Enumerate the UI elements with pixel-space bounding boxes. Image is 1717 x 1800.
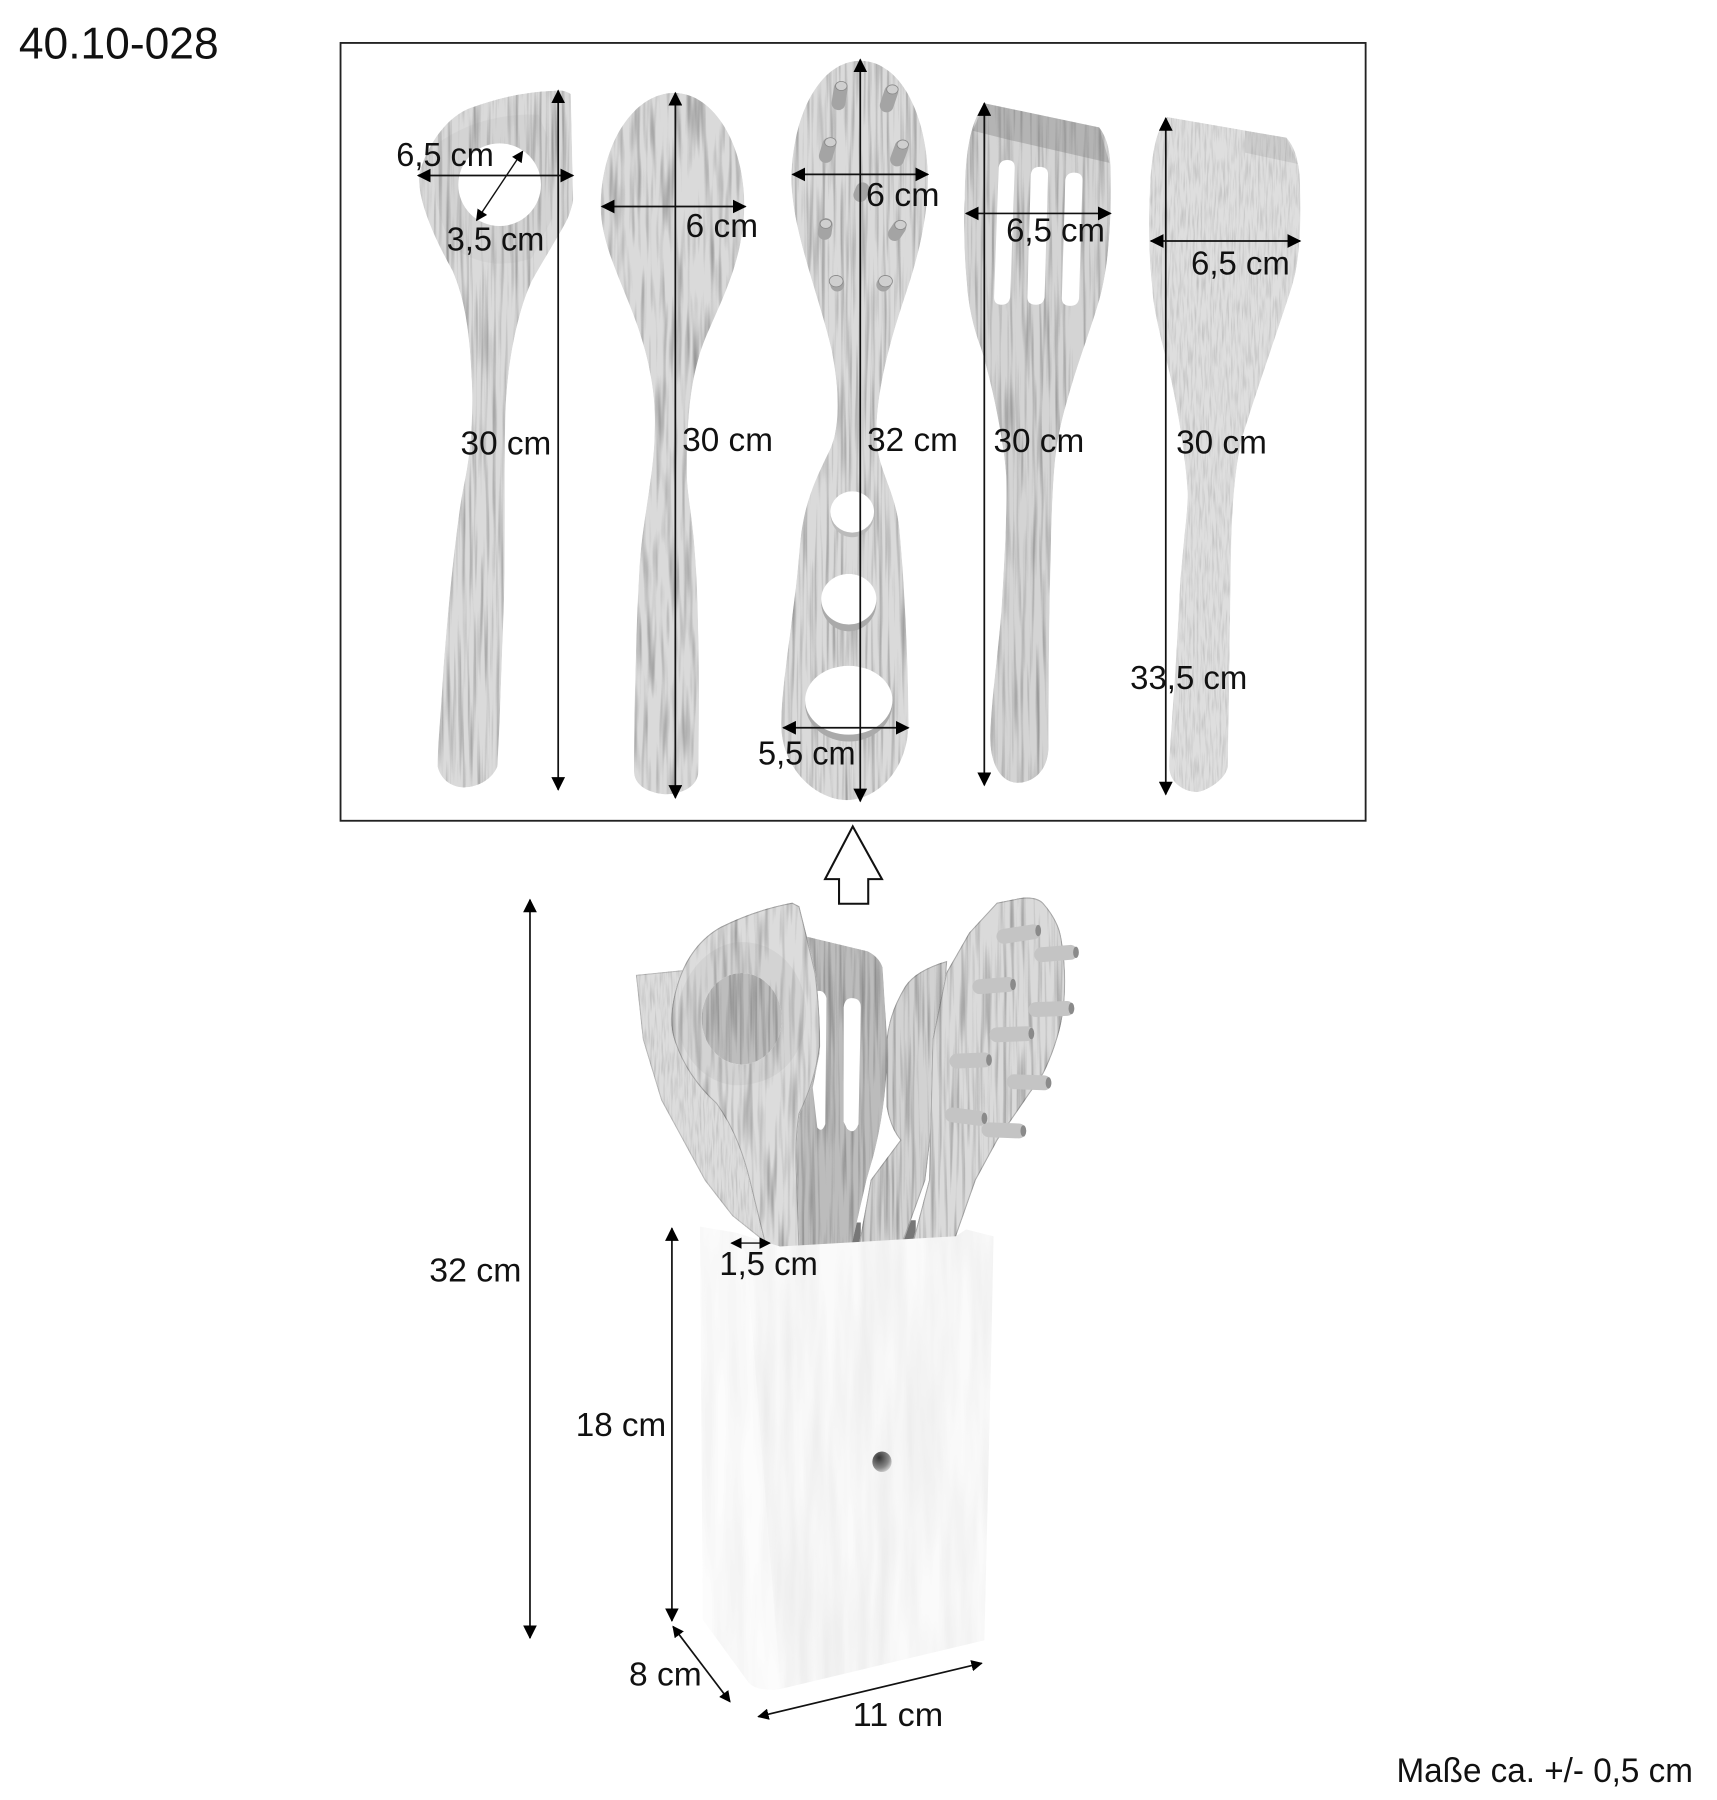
dimension labels: holder: 32 cm bbox=[429, 1253, 521, 1290]
arrow: outline up arrow between holder and panel bbox=[825, 826, 882, 904]
utensil: spaghetti spoon with pegs and holes bbox=[781, 61, 928, 800]
spatula slots bbox=[995, 161, 1082, 305]
dimension labels: top panel: 6,5 cm bbox=[1006, 213, 1105, 250]
dimension labels: holder: 18 cm bbox=[576, 1407, 666, 1444]
dimensions: holder arrows bbox=[530, 900, 982, 1717]
pegs bbox=[820, 81, 909, 287]
dimension labels: top panel: 3,5 cm bbox=[447, 222, 544, 259]
utensils in holder bbox=[636, 898, 1079, 1250]
slots in holder spatula bbox=[813, 991, 861, 1131]
dimension labels: top panel: 5,5 cm bbox=[758, 736, 856, 773]
dimension labels: holder: 8 cm bbox=[629, 1657, 702, 1694]
dimension labels: top panel: 6 cm bbox=[686, 208, 758, 245]
dimension labels: top panel: 32 cm bbox=[867, 422, 958, 459]
dimension labels: holder bbox=[429, 1246, 943, 1734]
flat spatula bevel bbox=[1245, 131, 1298, 164]
dimension labels: top panel: 30 cm bbox=[993, 423, 1084, 460]
dimension labels: holder: 1,5 cm bbox=[719, 1246, 818, 1283]
dimension labels: top panel: 30 cm bbox=[682, 422, 773, 459]
dimension labels: top panel: 30 cm bbox=[461, 425, 551, 462]
dimension labels: top panel: 30 cm bbox=[1176, 424, 1267, 461]
back flat spatula bbox=[636, 971, 790, 1250]
dimension labels: holder: 11 cm bbox=[853, 1697, 943, 1734]
utensil: solid spoon bbox=[601, 93, 744, 794]
title: article number: 40.10-028 bbox=[19, 19, 219, 68]
panel: utensil dimensions bbox=[341, 43, 1366, 821]
spoon bowl bevel bbox=[434, 115, 552, 264]
spoon hole bbox=[458, 143, 541, 226]
dimension labels: top panel: 6 cm bbox=[866, 177, 940, 214]
dimension labels: top panel: 33,5 cm bbox=[1130, 660, 1247, 697]
utensil: flat spatula bbox=[1149, 117, 1300, 792]
dark gaps behind utensils bbox=[847, 1220, 916, 1248]
spaghetti measure holes bbox=[805, 491, 892, 742]
dimension labels: top panel bbox=[396, 137, 1290, 773]
dimension labels: top panel: 6,5 cm bbox=[1191, 246, 1290, 283]
spaghetti spoon in holder bbox=[912, 898, 1065, 1245]
bowl bevel in holder bbox=[678, 942, 806, 1085]
note: tolerance: Maße ca. +/- 0,5 cm bbox=[1396, 1752, 1693, 1790]
back solid spoon bbox=[858, 962, 947, 1250]
slotted spatula in holder bbox=[778, 936, 887, 1250]
block side face bbox=[700, 1227, 781, 1689]
wooden holder block bbox=[700, 1227, 994, 1690]
utensil: spoon with hole bbox=[419, 90, 573, 787]
dimension labels: top panel: 6,5 cm bbox=[396, 137, 494, 174]
pegs in holder bbox=[952, 925, 1079, 1137]
panel frame bbox=[341, 43, 1366, 821]
block hole bbox=[872, 1451, 892, 1472]
spatula bevel bbox=[973, 103, 1110, 163]
dimensions: top panel arrows bbox=[418, 60, 1300, 801]
hole in holder spoon bbox=[702, 973, 782, 1065]
spoon with hole in holder bbox=[672, 903, 820, 1250]
utensil: slotted spatula bbox=[964, 103, 1111, 783]
